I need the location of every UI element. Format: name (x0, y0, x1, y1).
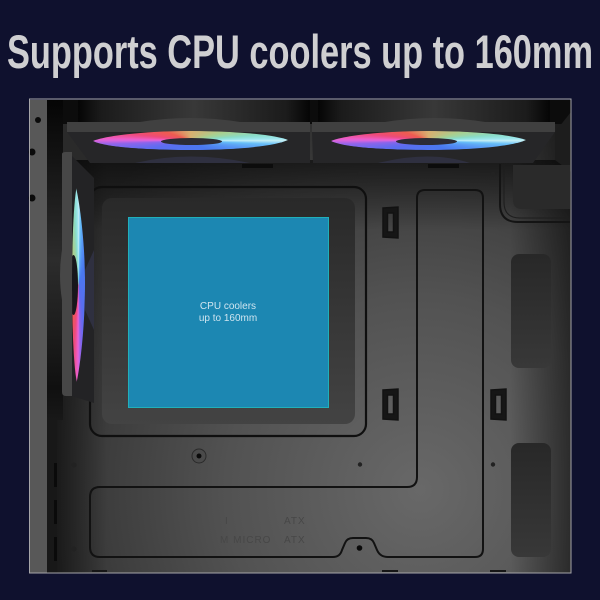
bottom clips (92, 570, 506, 572)
fan LED ring left (72, 188, 85, 382)
fan LED ring top left (93, 131, 288, 150)
motherboard tray outlines (90, 190, 483, 557)
lower right recess (500, 164, 570, 222)
top chamber behind the fans (47, 100, 571, 172)
left fan frame (60, 152, 94, 403)
cooler cut-out frame (90, 187, 366, 436)
fan LED ring top right (331, 131, 526, 150)
box label: CPU coolers (200, 301, 256, 312)
vented rounded recesses (511, 254, 551, 557)
faint form factor markings: M MICRO (220, 535, 271, 546)
panel border (30, 99, 571, 573)
cable slots (383, 207, 506, 420)
faint form factor markings: ATX (284, 535, 306, 546)
CPU cooler clearance box: up to 160mm (199, 313, 257, 324)
screw holes (72, 172, 495, 552)
top fan frame right (312, 118, 555, 168)
faint form factor markings: ATX (284, 516, 306, 527)
top fan frame left (67, 118, 310, 168)
left rear strip (28, 100, 63, 573)
faint form factor markings: I (225, 516, 229, 527)
CPU cooler clearance box (128, 218, 328, 408)
faint form factor markings (220, 516, 306, 546)
